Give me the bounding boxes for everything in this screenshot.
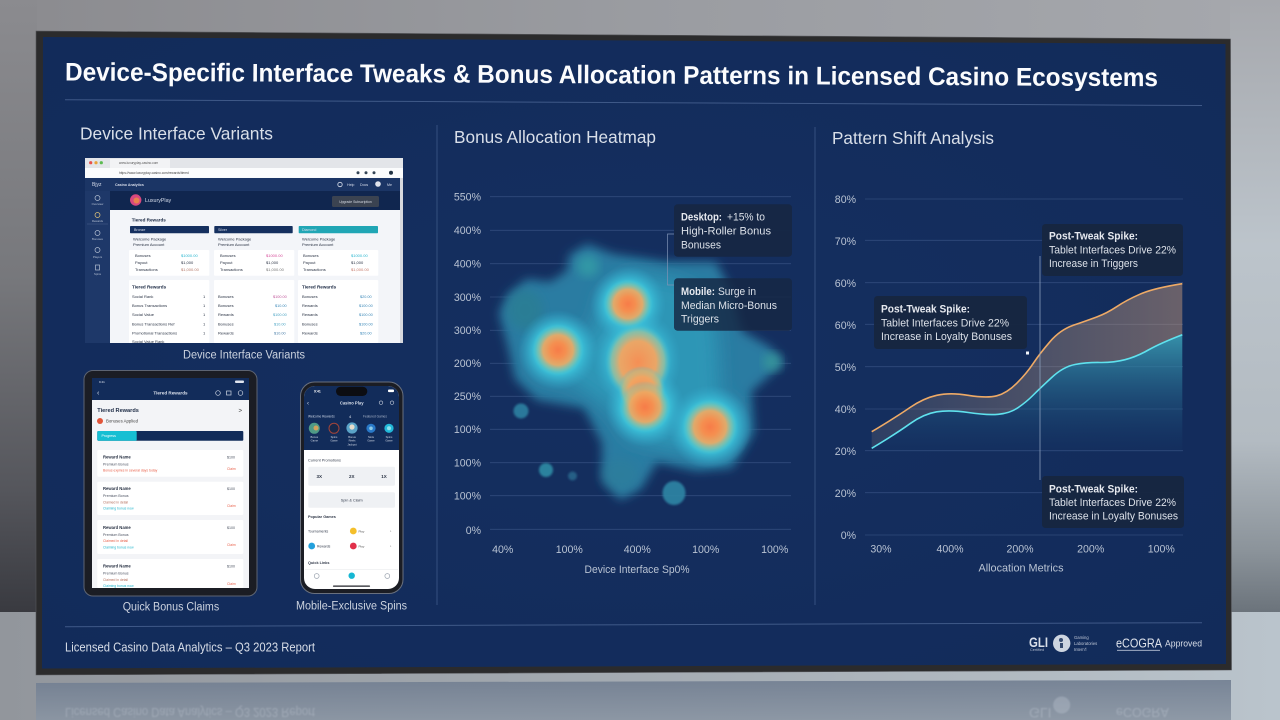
desktop browser mockup: Bonuses	[302, 294, 318, 299]
phone game icons: Jackpot	[347, 442, 357, 446]
heatmap grid and y axis: 400%	[454, 225, 482, 237]
phone mockup: Casino Play	[340, 400, 364, 406]
callout: left spike: Post-Tweak Spike:	[881, 303, 970, 315]
axis title: Allocation Metrics	[978, 562, 1064, 574]
desktop browser mockup: $100.00	[273, 295, 287, 299]
heatmap grid and y axis: 100%	[454, 490, 482, 502]
desktop browser mockup: $1000.00	[351, 253, 368, 258]
desktop browser mockup: $10.00	[274, 322, 286, 326]
callout: top spike: Tablet Interfaces Drive 22%	[1049, 245, 1176, 257]
tablet mockup: Tiered Rewards	[97, 408, 139, 414]
desktop browser mockup: $1,000	[181, 260, 194, 265]
footer report label: Licensed Casino Data Analytics – Q3 2023 Report	[65, 640, 315, 654]
tablet reward cards: $100	[227, 564, 235, 568]
heatmap x axis: 100%	[761, 544, 789, 556]
line chart	[835, 194, 1184, 574]
cyan line	[872, 335, 1182, 448]
phone mockup: Welcome Rewards	[308, 414, 335, 418]
callout: mobile: Surge in	[718, 286, 756, 298]
tablet reward cards: Premium Bonus	[103, 494, 129, 498]
phone mockup: Quick Links	[308, 561, 330, 565]
desktop browser mockup: Tiered Rewards	[132, 218, 166, 222]
heat blob	[499, 244, 785, 505]
desktop browser mockup: Overview	[92, 202, 104, 206]
phone mockup: 2X	[349, 474, 354, 479]
caption: device interface variants: Device Interface Variants	[183, 350, 305, 362]
phone mockup: Spin & Claim	[341, 498, 363, 502]
heatmap grid and y axis: 550%	[454, 192, 482, 204]
desktop browser mockup: Promotional Transactions	[132, 330, 177, 336]
x axis: 30%	[870, 544, 892, 556]
callout: top spike: Post-Tweak Spike:	[1049, 231, 1138, 243]
tablet reward cards: Bonus expires in several days today	[103, 468, 158, 472]
desktop browser mockup: Casino Analytics	[115, 183, 144, 187]
tablet reward cards: $100	[227, 456, 235, 460]
heading: bonus allocation heatmap: Bonus Allocation Heatmap	[454, 127, 656, 147]
certification logos	[1029, 634, 1202, 652]
line chart grid and y axis: 20%	[835, 446, 857, 458]
certification logos: GLI	[1029, 634, 1048, 650]
line chart grid and y axis: 0%	[841, 530, 857, 542]
desktop browser mockup: Me	[387, 183, 392, 187]
x axis: 400%	[936, 544, 964, 556]
phone mockup: 3X	[317, 474, 322, 479]
callout: mobile: Triggers	[681, 313, 719, 325]
heatmap grid and y axis: 0%	[466, 525, 482, 537]
tablet reward cards: Claim	[227, 582, 236, 586]
line chart grid and y axis: 60%	[835, 320, 857, 332]
callout: left spike: Tablet Interfaces Drive 22%	[881, 317, 1009, 329]
line chart grid and y axis: 60%	[835, 278, 857, 290]
tablet reward cards: Claim	[227, 543, 236, 547]
tablet reward cards: Claimed in detail	[103, 500, 128, 504]
desktop browser mockup: Diamond	[302, 228, 316, 232]
desktop browser mockup: Social Value Rank	[132, 339, 164, 344]
heatmap grid and y axis: 250%	[454, 391, 482, 403]
tablet reward cards: $100	[227, 487, 235, 491]
phone mockup: ›	[390, 544, 392, 548]
desktop browser mockup: Rewards	[92, 219, 104, 223]
phone mockup: ‹	[307, 401, 309, 407]
desktop browser mockup: Social Value	[132, 312, 155, 317]
desktop browser mockup: Transactions	[135, 267, 158, 272]
orange line	[872, 284, 1182, 432]
tablet reward cards: Reward Name	[103, 525, 131, 530]
heatmap grid and y axis: 300%	[454, 292, 482, 304]
desktop browser mockup: $1,000.00	[351, 267, 370, 272]
line chart grid and y axis: 70%	[835, 236, 857, 248]
tablet reward cards: Claim	[227, 504, 236, 508]
tablet reward cards: Reward Name	[103, 486, 131, 491]
desktop browser mockup: $1,000.00	[181, 267, 200, 272]
desktop browser mockup: Rewards	[302, 303, 318, 308]
callout: top spike: Increase in Triggers	[1049, 258, 1138, 270]
desktop browser mockup: Bonuses	[302, 322, 318, 326]
desktop browser mockup: 1	[203, 303, 206, 308]
caption: quick bonus claims: Quick Bonus Claims	[123, 602, 219, 614]
heatmap grid and y axis: 200%	[454, 358, 482, 370]
heatmap x axis: 100%	[692, 544, 720, 556]
desktop browser mockup: $1,000.00	[266, 267, 285, 272]
heatmap grid and y axis: 400%	[454, 258, 482, 270]
desktop browser mockup: Rewards	[218, 312, 234, 317]
desktop browser mockup: Premium Account	[218, 242, 250, 247]
tablet reward cards: Claimed in detail	[103, 539, 128, 543]
desktop browser mockup: $100.00	[359, 322, 373, 326]
desktop browser mockup: Payout	[135, 260, 148, 265]
floor reflection of the monitor: eCOGRA	[1116, 705, 1169, 719]
desktop browser mockup: Bronze	[134, 228, 145, 232]
x axis	[870, 544, 1175, 556]
tablet reward cards: Premium Bonus	[103, 572, 129, 576]
desktop browser mockup: Transactions	[220, 267, 243, 272]
desktop browser mockup: $100.00	[273, 313, 287, 317]
desktop browser mockup: Payout	[220, 260, 233, 265]
tablet reward cards: Reward Name	[103, 564, 131, 568]
desktop browser mockup: Rewards	[302, 312, 318, 317]
x axis: 200%	[1006, 544, 1034, 556]
phone mockup: Play	[358, 544, 365, 548]
line chart grid and y axis: 50%	[835, 362, 857, 374]
callout: left spike	[874, 296, 1027, 349]
tablet mockup: >	[238, 408, 242, 414]
heatmap grid and y axis: 100%	[454, 458, 482, 470]
phone game icons: Bonus	[348, 435, 356, 439]
callout: bottom spike	[1042, 476, 1184, 528]
desktop browser mockup: Docs	[360, 183, 368, 187]
phone game icons: Spins	[331, 435, 338, 439]
certification logos: Gaming	[1074, 635, 1089, 640]
desktop browser mockup: $20.00	[360, 295, 372, 299]
callout: mobile: Mobile:	[681, 286, 715, 298]
line chart grid and y axis	[835, 194, 1183, 542]
desktop browser mockup: www.luxuryplay-casino.com	[119, 161, 158, 165]
desktop browser mockup: Bonuses	[303, 253, 319, 258]
certification logos: eCOGRA	[1116, 636, 1163, 650]
desktop browser mockup: Bonuses	[92, 237, 104, 241]
tablet mockup: Tiered Rewards	[153, 390, 188, 396]
callout: bottom spike: Post-Tweak Spike:	[1049, 483, 1138, 495]
desktop browser mockup: Bonus Transactions Ref	[132, 322, 175, 326]
floor reflection of the monitor: Licensed Casino Data Analytics – Q3 2023 Report	[65, 705, 315, 719]
line chart grid and y axis: 80%	[835, 194, 857, 206]
title: Device-Specific Interface Tweaks & Bonus Allocation Patterns in Licensed Casino Ecosystems	[65, 59, 1158, 92]
phone game icons: Reels	[349, 438, 356, 442]
desktop browser mockup: 1	[203, 294, 206, 299]
phone mockup: 1X	[381, 474, 387, 479]
tablet reward cards	[97, 450, 243, 588]
desktop browser mockup: $20.00	[360, 332, 372, 336]
tablet mockup: 9:41	[99, 380, 105, 384]
desktop browser mockup: Bonuses	[218, 294, 234, 299]
desktop browser mockup: Payout	[303, 260, 316, 265]
tablet mockup: ‹	[97, 390, 100, 397]
desktop browser mockup: $100.00	[359, 304, 373, 308]
phone game icons: Game	[311, 438, 318, 442]
certification logos: Intern'l	[1074, 647, 1087, 652]
phone mockup: Featured Games	[363, 414, 387, 418]
desktop browser mockup: Welcome Package	[302, 236, 336, 242]
marker dot	[1026, 352, 1029, 354]
tablet reward cards: Claiming bonus now	[103, 546, 134, 550]
line chart grid and y axis: 40%	[835, 404, 857, 416]
tablet mockup	[84, 370, 257, 596]
line chart grid and y axis: 20%	[835, 488, 857, 500]
desktop browser mockup: Bonuses	[218, 322, 234, 326]
desktop browser mockup: $1000.00	[266, 253, 283, 258]
phone game icons: Game	[330, 438, 338, 442]
desktop browser mockup: LuxuryPlay	[145, 198, 172, 204]
desktop browser mockup	[85, 158, 403, 344]
desktop browser mockup: Players	[93, 255, 103, 259]
desktop browser mockup: Bonuses	[220, 253, 236, 258]
heatmap grid and y axis	[454, 192, 791, 537]
callout: mobile	[674, 278, 792, 331]
desktop browser mockup: Transactions	[303, 267, 326, 272]
callout: bottom spike: Increase in Loyalty Bonuses	[1049, 511, 1178, 523]
phone game icons: Slots	[368, 435, 375, 439]
desktop browser mockup: Tiered Rewards	[132, 284, 167, 290]
certification logos: Approved	[1165, 638, 1202, 650]
phone mockup: 9:41	[314, 390, 321, 394]
heading: pattern shift analysis: Pattern Shift Analysis	[832, 128, 994, 148]
desktop browser mockup: $100.00	[359, 313, 373, 317]
tablet reward cards: Premium Bonus	[103, 462, 129, 466]
phone mockup: Play	[358, 530, 365, 534]
desktop browser mockup: $10.00	[274, 332, 286, 336]
callout: desktop: Desktop:	[681, 212, 722, 224]
floor reflection of the monitor	[36, 680, 1231, 720]
tablet reward cards: Claim	[227, 467, 236, 471]
phone mockup: Tournaments	[308, 530, 328, 534]
desktop browser mockup: Upgrade Subscription	[339, 200, 372, 204]
tablet mockup: Progress	[102, 434, 116, 438]
phone game icons	[309, 422, 394, 446]
phone mockup: ›	[390, 528, 392, 534]
cyan halos	[518, 266, 752, 469]
heatmap x axis: 40%	[492, 544, 514, 556]
tablet reward cards: $100	[227, 526, 235, 530]
phone game icons: Spins	[386, 435, 393, 439]
desktop browser mockup: Silver	[218, 228, 228, 232]
phone game icons: Game	[367, 438, 375, 442]
desktop browser mockup: Bonuses	[135, 253, 151, 258]
desktop browser mockup: Bjyz	[92, 182, 102, 188]
callout: top spike	[1042, 224, 1183, 276]
tablet reward cards: Premium Bonus	[103, 533, 129, 537]
heatmap x axis: 100%	[556, 544, 583, 556]
callout: bottom spike: Tablet Interfaces Drive 22%	[1049, 497, 1176, 509]
tablet mockup: Bonuses Applied	[106, 418, 139, 424]
phone game icons: Bonus	[310, 435, 319, 439]
certification logos: Certified	[1030, 648, 1044, 652]
caption: mobile-exclusive spins: Mobile-Exclusive Spins	[296, 600, 407, 612]
callout: desktop: +15% to	[727, 212, 765, 224]
desktop browser mockup: Rewards	[218, 330, 234, 336]
desktop browser mockup: Tiered Rewards	[302, 284, 337, 290]
phone mockup: 4	[349, 414, 352, 419]
certification logos: Laboratories	[1074, 641, 1097, 646]
callout: left spike: Increase in Loyalty Bonuses	[881, 331, 1012, 343]
callout: desktop: High-Roller Bonus	[681, 226, 771, 238]
heatmap x axis	[492, 544, 789, 556]
desktop browser mockup: Bonuses	[218, 303, 234, 308]
desktop browser mockup: Social Rank	[132, 294, 153, 299]
desktop browser mockup: $1,000	[266, 260, 279, 265]
phone game icons: Game	[385, 438, 393, 442]
desktop browser mockup: 1	[203, 330, 206, 336]
x axis: 100%	[1148, 544, 1175, 556]
desktop browser mockup: Bonus Transactions	[132, 303, 167, 308]
desktop browser mockup: https://www.luxuryplay-casino.com/rewards/tiered	[119, 171, 189, 175]
desktop browser mockup: $10.00	[275, 304, 287, 308]
phone mockup	[300, 382, 403, 594]
heatmap grid and y axis: 100%	[454, 424, 482, 436]
desktop browser mockup: Rewards	[302, 330, 318, 336]
callout: desktop	[674, 204, 792, 257]
area below the cyan line	[872, 335, 1182, 452]
callout: mobile: Median Micro-Bonus	[681, 300, 777, 312]
heatmap grid and y axis: 300%	[454, 325, 482, 337]
area between the two lines	[872, 284, 1182, 448]
tablet reward cards: Claimed in detail	[103, 578, 128, 582]
x axis: 200%	[1077, 544, 1105, 556]
connector between heatmap callouts	[668, 234, 674, 285]
heatmap chart	[454, 192, 792, 576]
tablet reward cards: Claiming bonus now	[103, 584, 134, 588]
tablet reward cards: Claiming bonus now	[103, 506, 134, 510]
vertical marker line	[1039, 256, 1041, 480]
desktop browser mockup: Welcome Package	[133, 236, 167, 242]
callout: desktop: Bonuses	[681, 239, 721, 251]
desktop browser mockup: 1	[203, 322, 206, 326]
desktop browser mockup: Welcome Package	[218, 236, 252, 242]
phone mockup: Popular Games	[308, 515, 336, 519]
phone mockup: Current Promotions	[308, 458, 341, 462]
desktop browser mockup: $1000.00	[181, 253, 198, 258]
tablet reward cards: Reward Name	[103, 454, 131, 460]
desktop browser mockup: Spins	[94, 272, 102, 276]
desktop browser mockup: $1,000	[351, 260, 364, 265]
desktop browser mockup: Premium Account	[302, 242, 334, 247]
heading: device interface variants: Device Interface Variants	[80, 124, 273, 144]
heatmap axis title: Device Interface Sp0%	[584, 564, 690, 576]
heatmap x axis: 400%	[624, 544, 651, 556]
desktop browser mockup: 1	[203, 312, 206, 317]
phone mockup: Rewards	[317, 544, 331, 548]
desktop browser mockup: Premium Account	[133, 242, 165, 247]
desktop browser mockup: Help	[347, 183, 354, 187]
